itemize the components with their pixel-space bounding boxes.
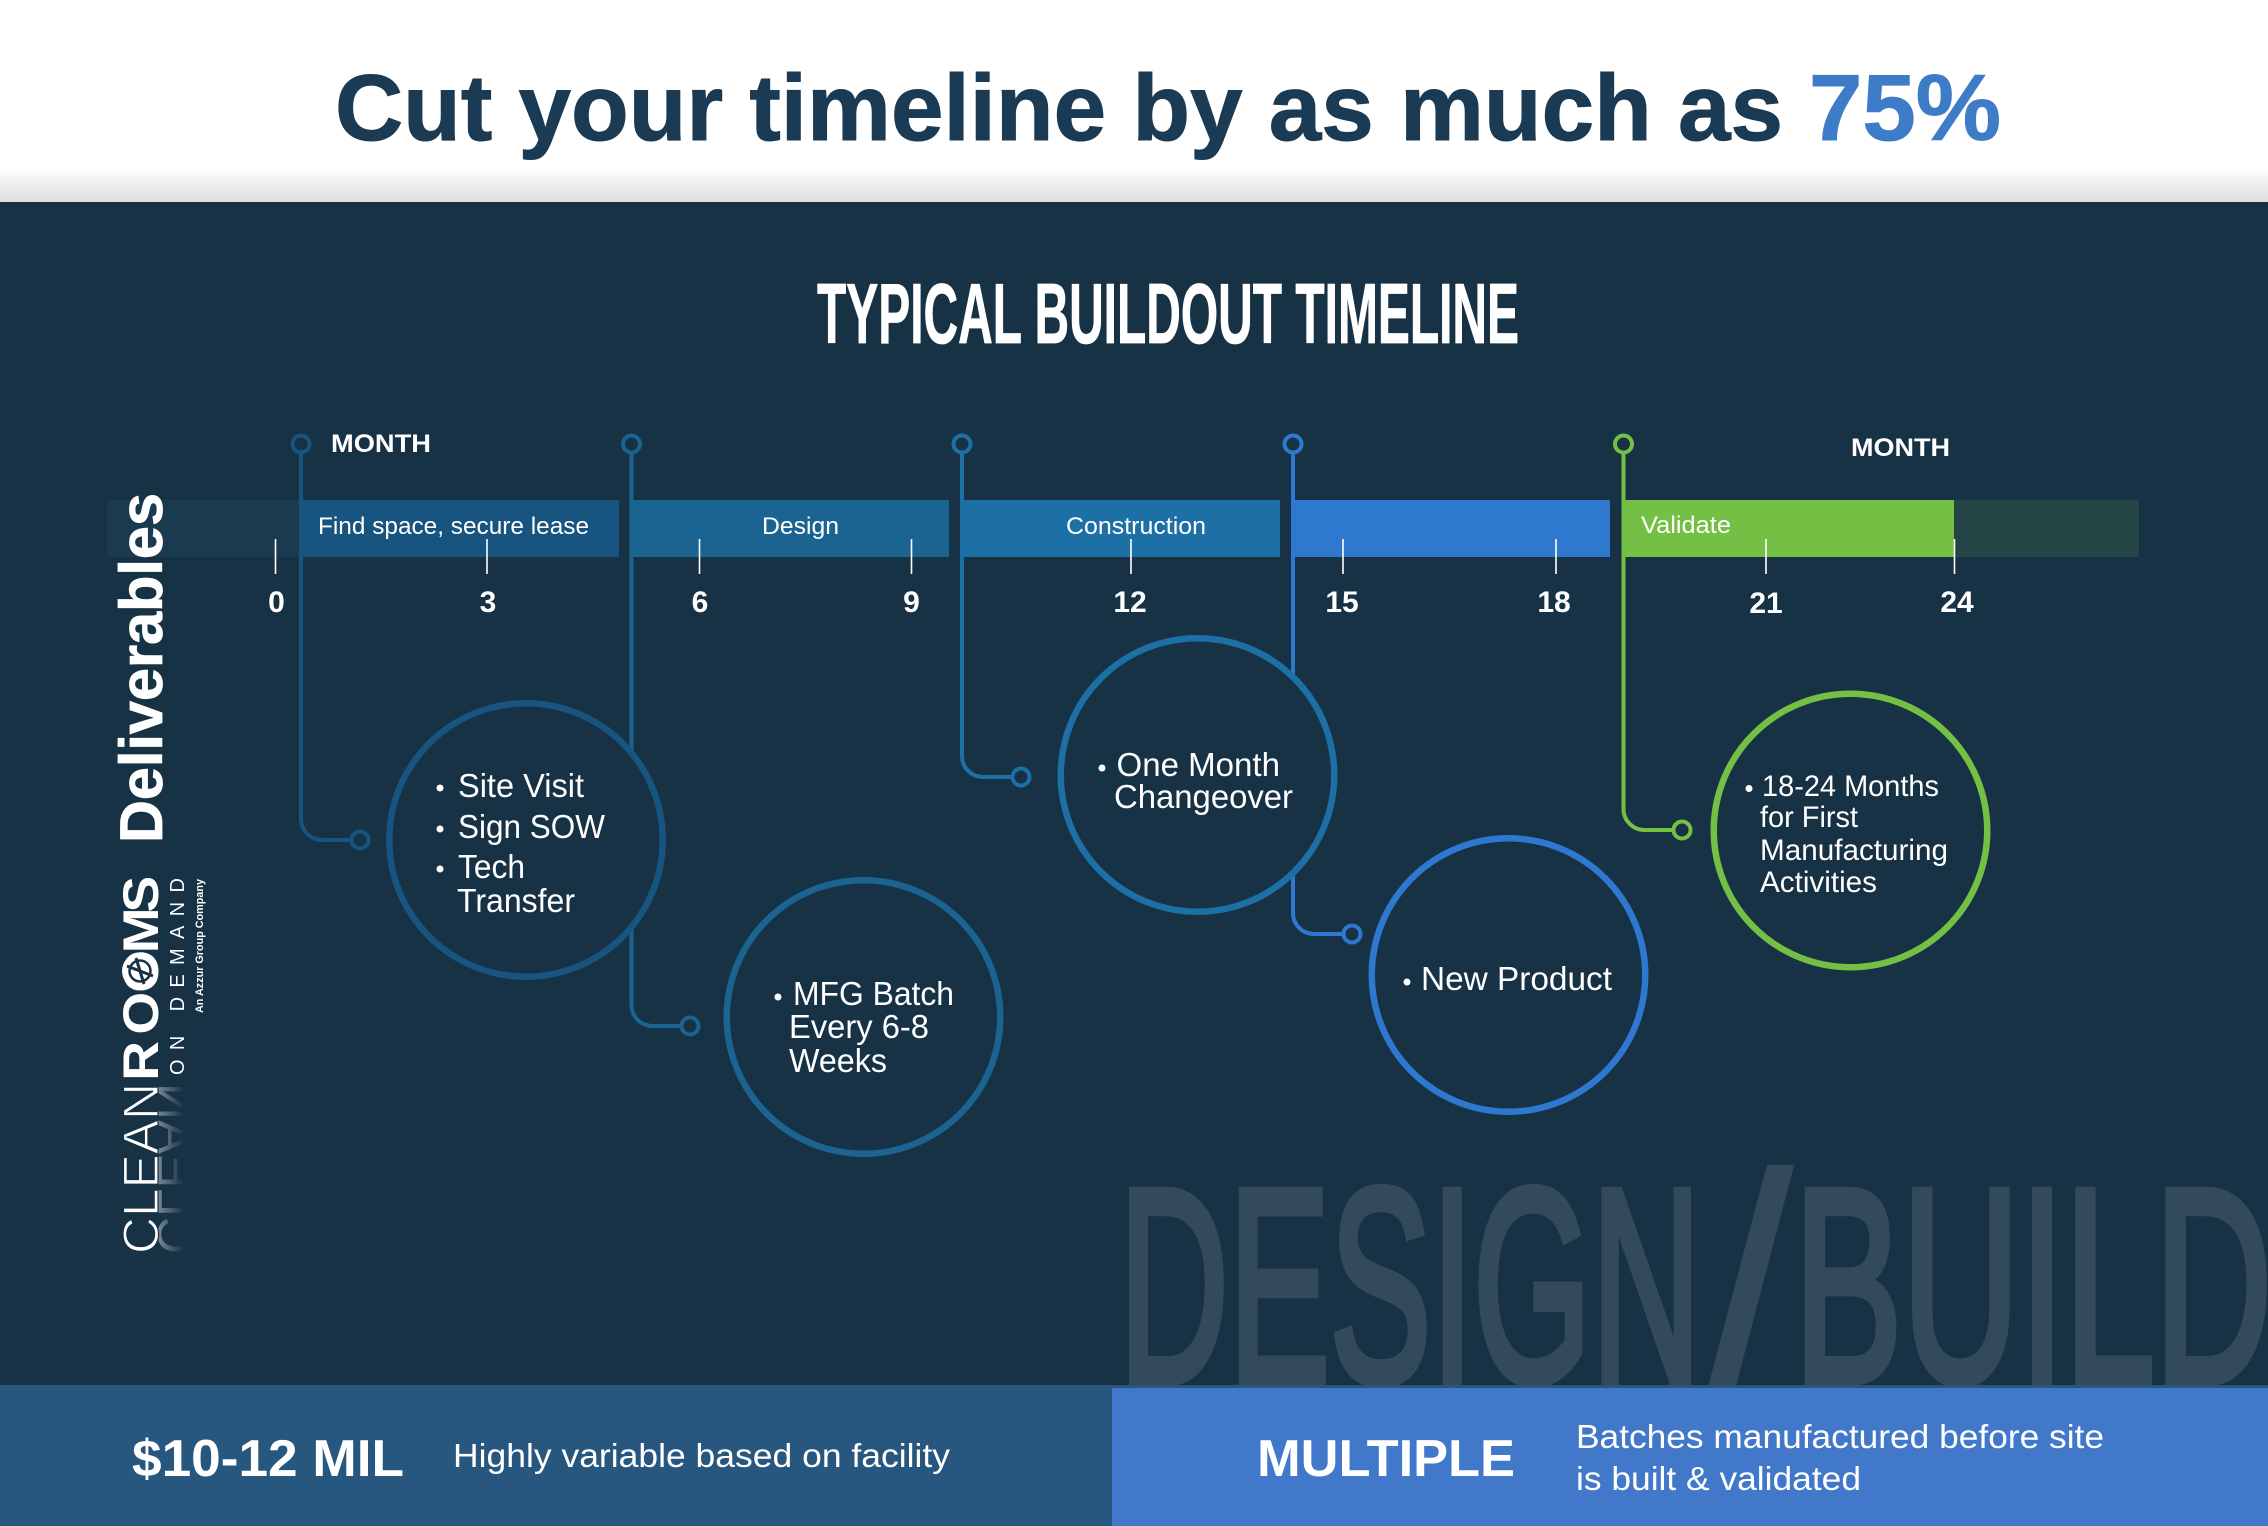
- headline: Cut your timeline by as much as: [335, 55, 1783, 160]
- deliverable circle: new product: [1372, 838, 1645, 1112]
- phase label: Validate: [1641, 512, 1731, 539]
- deliverable circle: first manufacturing: Activities: [1760, 866, 1877, 899]
- segment: design: [630, 500, 949, 557]
- phase label: Design: [762, 513, 839, 540]
- month number: 3: [480, 586, 496, 619]
- deliverable circle: one month changeover: One Month: [1116, 746, 1280, 783]
- deliverable circle: first manufacturing: for First: [1760, 801, 1859, 834]
- axis heading right: MONTH: [1851, 434, 1950, 462]
- connector: construction: [954, 436, 1030, 786]
- cost note: Highly variable based on facility: [453, 1437, 951, 1474]
- logo tagline ON DEMAND: ON DEMAND: [167, 878, 189, 1075]
- connector: fourth phase: [1284, 436, 1360, 942]
- connector: find space: [292, 436, 368, 848]
- deliverable circle: one month changeover: [1061, 638, 1334, 912]
- footer right panel: [1112, 1388, 2268, 1526]
- deliverable circle: site visit: Sign SOW: [458, 808, 606, 845]
- connector: design: [623, 436, 698, 1034]
- logo sub-tagline: An Azzur Group Company: [194, 878, 206, 1013]
- deliverable circle: site visit: [389, 703, 663, 977]
- watermark: DESIGN/BUILD: /: [1711, 1114, 1792, 1445]
- month number: 24: [1940, 586, 1974, 619]
- deliverable circle: MFG batch: Weeks: [789, 1042, 887, 1079]
- month number: 18: [1537, 586, 1571, 619]
- icon: globe in logo: [122, 953, 158, 989]
- deliverable circle: first manufacturing: [1714, 694, 1987, 967]
- phase label: Construction: [1066, 513, 1206, 540]
- logo: Cleanrooms on Demand: [113, 876, 206, 1254]
- batches note second line: is built & validated: [1576, 1460, 1861, 1497]
- headline: 75%: [1809, 55, 2001, 160]
- deliverable circle: site visit: Transfer: [457, 882, 575, 919]
- segment: find space: [299, 500, 619, 557]
- multiple heading: MULTIPLE: [1257, 1430, 1515, 1488]
- watermark: DESIGN/BUILD: DESIGN: [1119, 1132, 1701, 1440]
- deliverable circle: site visit: Site Visit: [458, 767, 584, 804]
- deliverable circle: new product: New Product: [1421, 960, 1612, 997]
- month number: 12: [1113, 586, 1147, 619]
- main dark panel: [0, 202, 2268, 1385]
- timeline bar: [107, 500, 2139, 557]
- connector: validate: [1615, 436, 1690, 838]
- logo wordmark ROOMS: ROOMS: [113, 876, 169, 1081]
- month labels: [268, 430, 1974, 620]
- cost figure: $10-12 MIL: [132, 1430, 404, 1488]
- panel title: TYPICAL BUILDOUT TIMELINE: [817, 267, 1519, 362]
- month number: 15: [1325, 586, 1359, 619]
- label: Deliverables: Deliverables: [108, 493, 175, 843]
- month number: 21: [1749, 587, 1783, 620]
- deliverable circle: site visit: Tech: [458, 848, 525, 885]
- month number: 9: [903, 586, 920, 619]
- segment: construction: [960, 500, 1280, 557]
- trailing segment: [1954, 500, 2139, 557]
- lead-in segment: [107, 500, 299, 557]
- segment: fourth phase: [1291, 500, 1610, 557]
- logo wordmark CLEAN: CLEAN: [113, 1083, 169, 1254]
- deliverable circle: MFG batch: Every 6-8: [789, 1008, 929, 1045]
- month number: 6: [692, 586, 708, 619]
- deliverable circle: first manufacturing: 18-24 Months: [1762, 770, 1939, 803]
- footer left panel: [0, 1385, 2268, 1526]
- logo reflection: CLEAN: [147, 1083, 203, 1254]
- deliverable circle: MFG batch: MFG Batch: [793, 975, 954, 1012]
- segment: validate: [1622, 500, 1954, 557]
- deliverable circle: MFG batch: [727, 880, 1000, 1154]
- phase label: Find space, secure lease: [318, 513, 589, 540]
- deliverable circle: one month changeover: Changeover: [1114, 778, 1293, 815]
- batches note: Batches manufactured before site: [1576, 1418, 2104, 1455]
- axis heading left: MONTH: [331, 430, 431, 458]
- month number: 0: [268, 586, 285, 619]
- header band: [0, 0, 2268, 202]
- month axis ticks: [276, 539, 1954, 574]
- deliverable circle: first manufacturing: Manufacturing: [1760, 834, 1948, 867]
